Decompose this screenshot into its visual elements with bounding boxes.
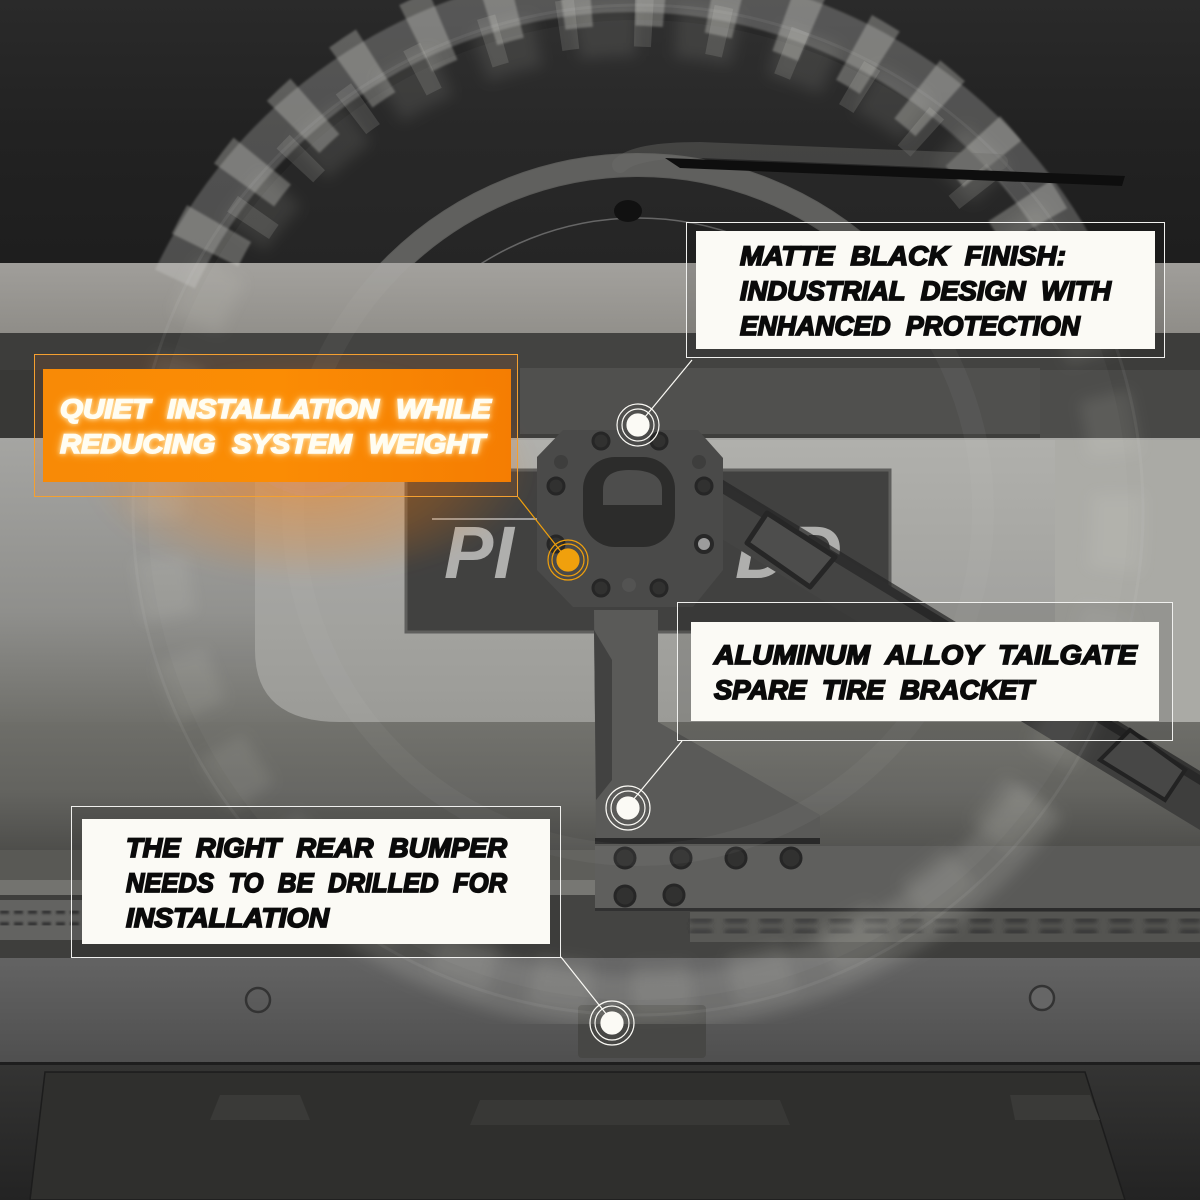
marker: matte finish <box>617 360 692 446</box>
text: matte black finish <box>740 241 1112 341</box>
text: quiet installation: REDUCING SYSTEM WEIGHT <box>60 429 488 459</box>
ghosted spare tire <box>133 0 1143 1015</box>
callout: aluminum alloy bracket <box>678 602 1172 740</box>
text: matte black finish: ENHANCED PROTECTION <box>740 311 1080 341</box>
text: matte black finish: MATTE BLACK FINISH: <box>740 241 1066 271</box>
bracket upright <box>578 610 1200 1058</box>
marker: bracket <box>606 741 682 830</box>
marker: rear bumper <box>561 957 634 1045</box>
text: matte black finish: INDUSTRIAL DESIGN WITH <box>740 276 1112 306</box>
text: rear bumper drilling: THE RIGHT REAR BUMPER <box>126 833 507 863</box>
text: quiet installation: QUIET INSTALLATION WHILE <box>60 394 492 424</box>
bracket hub plate <box>537 430 723 607</box>
logo plate: PI <box>444 511 515 594</box>
bracket arm <box>720 478 1200 830</box>
callout: matte black finish <box>686 222 1164 358</box>
text: rear bumper drilling: NEEDS TO BE DRILLED FOR <box>126 868 507 898</box>
text: aluminum alloy bracket <box>713 640 1138 705</box>
callout: rear bumper drilling <box>72 806 560 958</box>
text: rear bumper drilling <box>126 833 507 933</box>
text: quiet installation <box>60 394 492 459</box>
orange glow under callout <box>85 358 535 582</box>
text: aluminum alloy bracket: ALUMINUM ALLOY TAILGATE <box>713 640 1138 670</box>
text: rear bumper drilling: INSTALLATION <box>126 903 330 933</box>
callout: quiet installation <box>34 354 518 496</box>
logo plate: DD <box>735 511 842 594</box>
marker: quiet installation <box>518 497 588 580</box>
text: aluminum alloy bracket: SPARE TIRE BRACKET <box>714 675 1037 705</box>
logo plate <box>406 470 890 632</box>
wiper <box>614 150 1125 222</box>
